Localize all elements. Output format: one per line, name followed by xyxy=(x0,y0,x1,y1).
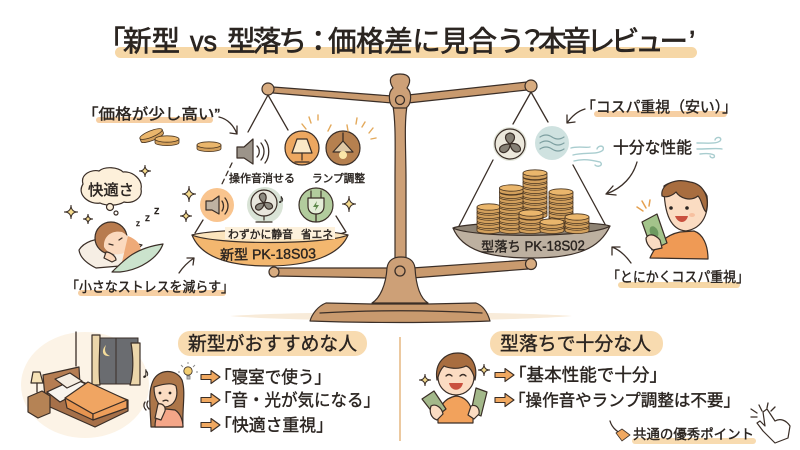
arrow: common points xyxy=(610,421,625,435)
common strengths label: 共通の優秀ポイント xyxy=(633,427,754,442)
sparkles xyxy=(419,364,490,386)
icon: fan right xyxy=(493,127,527,161)
new model pan xyxy=(192,230,348,266)
person with cash, right xyxy=(637,181,708,259)
old model arrow and callout: 「コスパ重視（安い）」 xyxy=(581,99,737,116)
sleeping z marks: z xyxy=(136,219,140,228)
panel: bedroom illustration xyxy=(21,332,149,438)
decorative centre divider xyxy=(399,337,401,441)
feature label: slightly quiet: わずかに静音 xyxy=(228,227,293,241)
arrow: performance to coins xyxy=(606,162,637,195)
feature label backing xyxy=(225,227,335,239)
bed xyxy=(43,367,128,427)
sleeping z marks: z xyxy=(145,213,150,224)
arrow: price to speaker xyxy=(219,117,237,134)
icon: pointing hand xyxy=(751,403,790,443)
panel: new model recommendation xyxy=(178,331,380,435)
list: basic performance: 「基本性能で十分」 xyxy=(509,365,667,385)
window xyxy=(92,335,140,385)
person: woman thinking xyxy=(142,362,198,427)
nightstand xyxy=(28,372,50,418)
list: sensitive to sound and light: 「音・光が気になる」 xyxy=(215,391,380,410)
heading pill: 型落ちで十分な人 xyxy=(500,333,651,355)
title: 価格差に見合う xyxy=(328,26,525,58)
title xyxy=(97,26,697,58)
panel: old model recommendation xyxy=(490,331,740,410)
person: happy with cash xyxy=(419,353,490,423)
list: bedroom use: 「寝室で使う」 xyxy=(215,367,331,387)
right pan hanging strings xyxy=(459,92,606,226)
icon: light bulb xyxy=(178,362,198,379)
heading pill: 新型がおすすめな人 xyxy=(188,333,357,355)
feature label: energy saving: 省エネ xyxy=(301,227,333,241)
list: no need for extras: 「操作音やランプ調整は不要」 xyxy=(509,391,740,410)
icon: wind circle xyxy=(535,126,569,160)
money left xyxy=(422,391,446,420)
title: 「 xyxy=(97,26,126,58)
old pan label: 型落ち PK-18S02 xyxy=(481,237,585,255)
title: vs xyxy=(190,26,217,58)
sparkles left xyxy=(64,165,356,224)
old model arrow and callout xyxy=(567,99,737,123)
arrow: stress callout to pan xyxy=(179,258,194,273)
thought bubble: comfort xyxy=(81,168,141,215)
thought bubble: comfort: 快適さ xyxy=(88,182,134,199)
icon: quiet fan: ♪ xyxy=(278,192,284,206)
pan label: 新型 PK-18S03 xyxy=(220,245,316,263)
list: comfort first: 「快適さ重視」 xyxy=(215,416,333,435)
feature label: operation sound: 操作音消せる xyxy=(229,171,295,185)
icon: eco plug xyxy=(299,188,333,222)
icon: speaker upper xyxy=(237,139,269,164)
coin stack group xyxy=(477,170,589,234)
title: 本音レビュー xyxy=(538,26,688,58)
sufficient performance label: 十分な性能 xyxy=(613,139,692,157)
sleeping z marks xyxy=(136,205,160,228)
title: 新型 xyxy=(123,26,180,58)
title: ？ xyxy=(518,26,547,58)
icon: speaker lower xyxy=(200,188,234,222)
person: woman thinking: ♪ xyxy=(142,365,150,382)
balance scale xyxy=(262,74,537,322)
title: 型落ち xyxy=(227,26,307,58)
icon: pendant lamp xyxy=(326,131,360,165)
icon: table lamp xyxy=(285,131,319,165)
feature label: lamp adjustment: ランプ調整 xyxy=(312,171,365,185)
icon: coins xyxy=(139,127,221,152)
arrow and callout: cost performance xyxy=(607,247,749,288)
icon: small orange arrow xyxy=(616,429,630,441)
wind swirl right xyxy=(697,137,722,158)
money right xyxy=(468,388,487,419)
price callout: 「価格が少し高い” xyxy=(82,106,220,123)
wind swirl left xyxy=(571,146,603,166)
title: ’ xyxy=(689,26,695,58)
title: ： xyxy=(304,26,333,58)
left pan hanging strings xyxy=(195,95,346,234)
base shadow wash xyxy=(230,312,572,320)
arrow and callout: cost performance: 「とにかくコスパ重視」 xyxy=(607,269,749,285)
old model pan xyxy=(453,170,610,258)
sleeping z marks: z xyxy=(154,205,160,217)
sleeping person xyxy=(79,222,163,272)
lamp light rays xyxy=(302,115,376,139)
icon: quiet fan xyxy=(247,187,284,223)
stress callout: 「小さなストレスを減らす」 xyxy=(66,279,234,295)
